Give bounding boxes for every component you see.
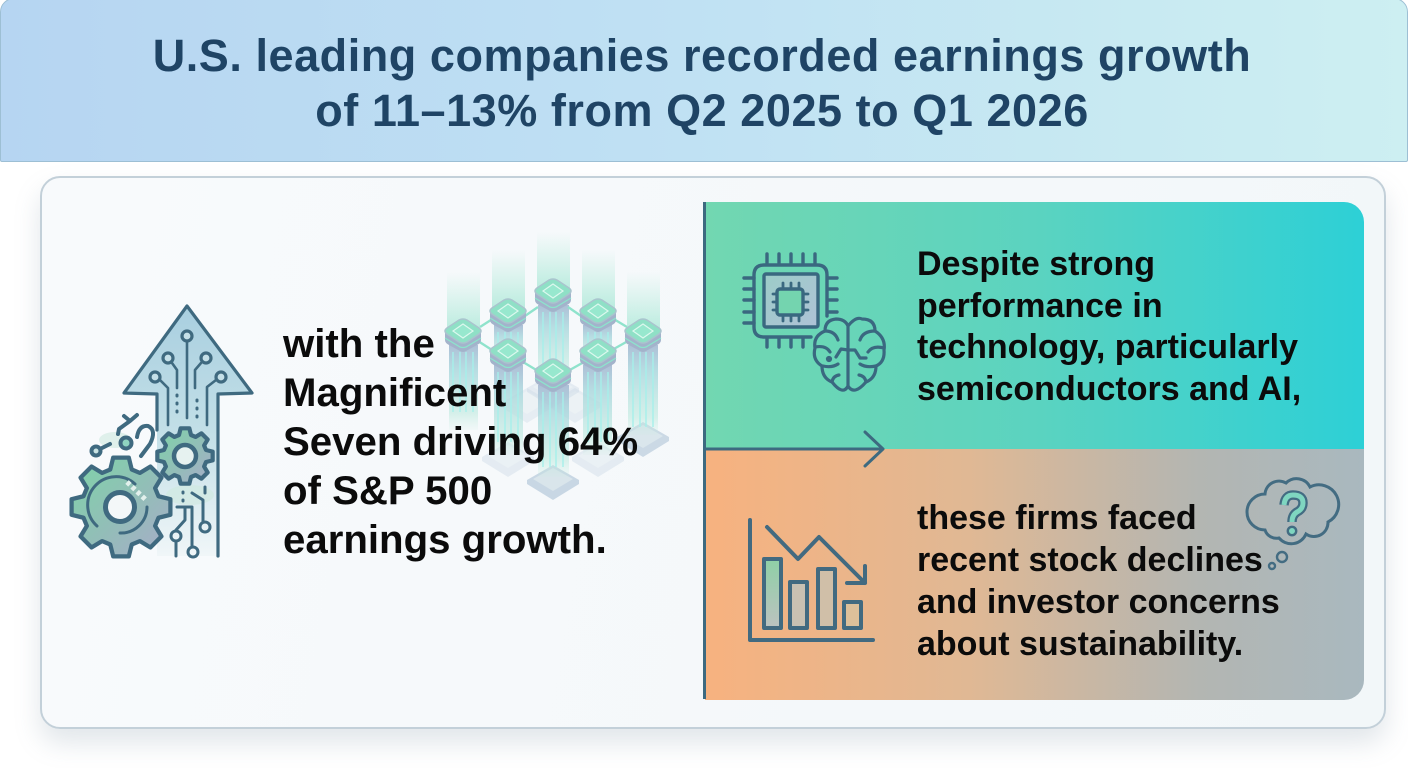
icon: chip — [744, 254, 837, 347]
icon: brain — [814, 318, 884, 390]
title banner — [0, 0, 1408, 162]
pillar capitals — [445, 319, 481, 352]
title — [153, 30, 1251, 136]
text block: investor concerns: recent stock declines — [917, 541, 1263, 579]
text block: investor concerns — [917, 499, 1280, 663]
light beams — [447, 232, 660, 332]
text block: Magnificent Seven: earnings growth. — [283, 517, 607, 562]
illustration: growth arrow with gears — [72, 306, 252, 557]
text block: technology performance: performance in — [917, 286, 1163, 324]
text block: technology performance — [917, 245, 1301, 408]
title: U.S. leading companies recorded earnings growth — [153, 30, 1251, 81]
text block: investor concerns: these firms faced — [917, 499, 1197, 537]
text block: technology performance: semiconductors and AI, — [917, 370, 1301, 408]
pillar shafts — [449, 345, 478, 430]
main card panel — [40, 176, 1386, 729]
icon: broken gear fragments — [92, 415, 153, 456]
text block: Magnificent Seven: with the — [283, 321, 435, 366]
icon: large gear — [72, 458, 170, 556]
text block: Magnificent Seven: Magnificent — [283, 370, 506, 415]
text block: investor concerns: and investor concerns — [917, 583, 1280, 621]
icon: circuit arrow — [124, 306, 252, 556]
divider axes with arrow — [704, 202, 883, 699]
panel: technology strength — [705, 202, 1364, 449]
text block: technology performance: Despite strong — [917, 245, 1155, 283]
pillar shaft lines — [453, 352, 473, 412]
text block: technology performance: technology, particularly — [917, 328, 1298, 366]
icon: small gear — [157, 428, 213, 484]
text block: Magnificent Seven: of S&P 500 — [283, 468, 492, 513]
text block: Magnificent Seven: Seven driving 64% — [283, 419, 638, 464]
illustration: seven pillars — [445, 232, 669, 500]
text block: Magnificent Seven — [282, 321, 638, 562]
title: of 11–13% from Q2 2025 to Q1 2026 — [315, 85, 1089, 136]
pillar bases — [482, 373, 669, 500]
icon: green wash behind gears — [99, 432, 214, 505]
panel: stock declines — [705, 449, 1364, 700]
icon: thought bubble with question mark — [1247, 479, 1339, 569]
icon: falling bar chart — [750, 520, 873, 640]
text block: investor concerns: about sustainability. — [917, 625, 1243, 663]
icon: lower circuit traces — [171, 487, 210, 557]
connecting lines — [478, 307, 628, 371]
